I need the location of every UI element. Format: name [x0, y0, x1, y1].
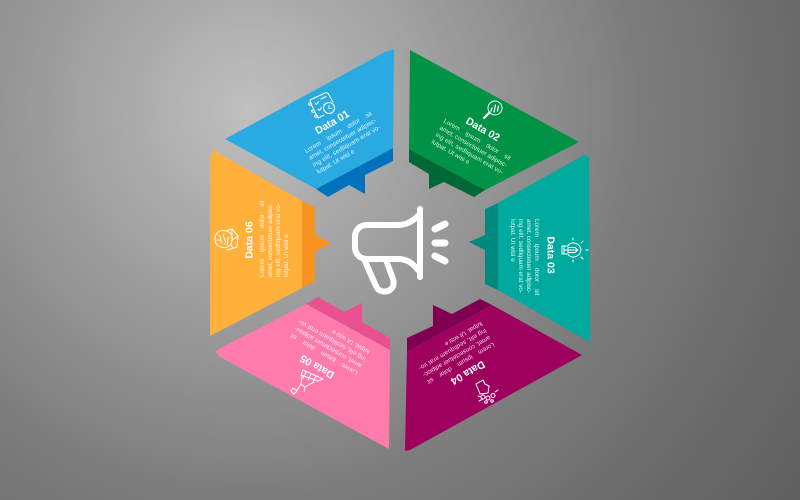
content: Data 03: lutpat. Ut wisi e: [509, 219, 516, 262]
panel: Data 01: [225, 49, 394, 197]
panel: Data 06: [210, 150, 331, 336]
icon: brain and box: [215, 229, 238, 250]
content: Data 04: lutpat. Ut wisi e: [443, 320, 484, 348]
panel: Data 04: [405, 299, 582, 451]
content: Data 01: ing elit, sedliquam erat vo-: [312, 124, 382, 169]
content: Data 06: [244, 200, 290, 277]
content: Data 01: lutpat. Ut wisi e: [316, 148, 356, 176]
content: Data 04: Lorem ipsum dolor sit: [426, 341, 496, 385]
icon: megaphone: [355, 209, 445, 292]
panel: Data 02: [409, 50, 579, 197]
icon: light bulb with pencil: [562, 238, 588, 262]
content: Data 05: ing elit, sedliquam erat vo-: [297, 318, 367, 362]
icon: document network: [476, 380, 498, 403]
content: Data 01: Lorem ipsum dolor sit: [304, 110, 373, 155]
content: Data 05: [281, 311, 371, 391]
content: Data 03: ing elit, sedliquam erat vo-: [517, 219, 524, 293]
content: Data 06: ing elit, sedliquam erat vo-: [275, 203, 282, 277]
content: Data 03: Data 03: [544, 236, 556, 274]
content: Data 05: amet, consectetuer adipisc-: [293, 325, 363, 369]
panel: Data 03: [469, 155, 590, 342]
content: Data 04: [413, 320, 503, 398]
panel: Data 05: [215, 297, 390, 449]
content: Data 02: Data 02: [463, 115, 502, 144]
content: Data 01: Data 01: [313, 108, 352, 137]
content: Data 05: Lorem ipsum dolor sit: [289, 332, 359, 376]
content: Data 03: amet, consectetuer adipisc-: [525, 219, 532, 293]
content: Data 02: [430, 105, 519, 183]
content: Data 01: amet, consectetuer adipisc-: [308, 117, 378, 162]
content: Data 06: Lorem ipsum dolor sit: [259, 200, 266, 277]
content: Data 05: lutpat. Ut wisi e: [330, 328, 371, 355]
content: Data 02: lutpat. Ut wisi e: [430, 139, 471, 166]
content: Data 04: amet, consectetuer adipisc-: [421, 334, 492, 378]
icon: checklist: [309, 93, 334, 118]
icon: magnifier chart: [484, 101, 502, 118]
content: Data 02: Lorem ipsum dolor sit: [442, 118, 512, 162]
content: Data 01: [296, 98, 386, 176]
icon: drafting tool: [291, 370, 323, 394]
content: Data 03: [509, 219, 556, 296]
content: Data 05: Data 05: [298, 352, 337, 381]
content: Data 04: ing elit, sedliquam erat vo-: [417, 327, 488, 371]
content: Data 06: Data 06: [244, 221, 256, 259]
content: Data 02: ing elit, sedliquam erat vo-: [434, 132, 504, 176]
content: Data 04: Data 04: [448, 358, 487, 387]
content: Data 06: amet, consectetuer adipisc-: [267, 203, 274, 277]
content: Data 02: amet, consectetuer adipisc-: [438, 125, 508, 169]
content: Data 03: Lorem ipsum dolor sit: [533, 219, 540, 296]
content: Data 06: lutpat. Ut wisi e: [283, 234, 290, 277]
